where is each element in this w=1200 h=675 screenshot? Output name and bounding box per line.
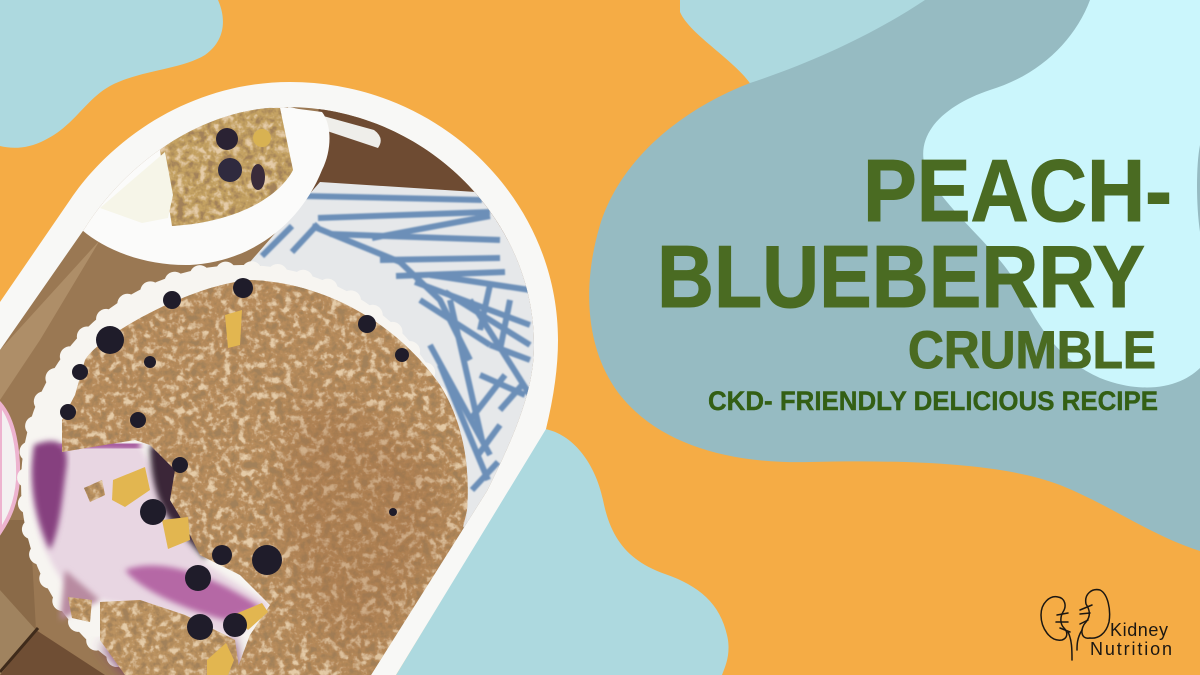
title line: PEACH-: PEACH- [863,141,1172,240]
fluted baking dish [21,265,463,675]
serving bowl [82,100,330,265]
spoon handle [287,106,381,148]
title line: BLUEBERRY: BLUEBERRY [657,227,1145,326]
title: recipe name [657,141,1172,380]
blob: top left light blue [0,0,223,148]
icon: kidneys [1041,590,1110,660]
logo text: Kidney: Kidney [1110,620,1168,640]
logo text: Nutrition: Nutrition [1090,639,1172,659]
subtitle: CKD- FRIENDLY DELICIOUS RECIPE [708,386,1158,416]
wood table [0,100,540,675]
blob: pale blue [923,0,1200,387]
blob: bottom centre light blue [396,429,729,675]
title line: CRUMBLE: CRUMBLE [908,321,1156,380]
blueberries [60,278,409,640]
blob: top right light blue [680,0,935,86]
photo: peach blueberry crumble [0,100,540,675]
crumble topping [62,280,468,675]
pink side dish [0,404,18,532]
blob: large teal [589,0,1200,551]
peach pieces [112,310,268,675]
striped cloth [250,182,540,540]
logo: Kidney Nutrition [1041,590,1172,660]
photo frame: white capsule [0,82,558,675]
purple fruit juice [32,441,270,675]
